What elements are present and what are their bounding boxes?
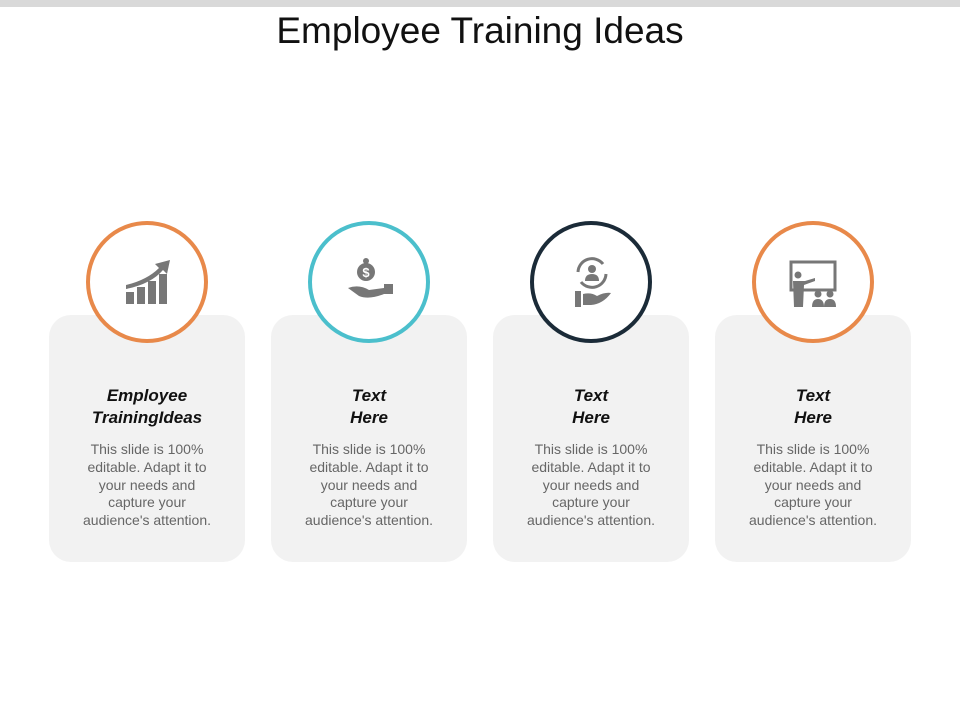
panel: card 3 <box>493 315 689 562</box>
text 3: audience's attention. <box>527 512 655 528</box>
text 4 <box>749 441 877 528</box>
text 3 <box>527 441 655 528</box>
heading 1 <box>92 386 202 427</box>
text 2: This slide is 100% <box>313 441 425 457</box>
text 4: audience's attention. <box>749 512 877 528</box>
heading 3 <box>572 386 610 427</box>
panel: card 4 <box>715 315 911 562</box>
text 1: your needs and <box>99 477 195 493</box>
panel: card 1 <box>49 315 245 562</box>
heading 1: Employee <box>107 386 187 405</box>
heading 3: Here <box>572 408 610 427</box>
icon: growth chart <box>86 221 208 343</box>
icon: presentation <box>752 221 874 343</box>
text 3: editable. Adapt it to <box>531 459 651 475</box>
text 4: editable. Adapt it to <box>753 459 873 475</box>
text 3: This slide is 100% <box>535 441 647 457</box>
text 1: capture your <box>108 494 186 510</box>
text 4: capture your <box>774 494 852 510</box>
text 2: capture your <box>330 494 408 510</box>
heading 3: Text <box>574 386 608 405</box>
text 2: your needs and <box>321 477 417 493</box>
text 2: audience's attention. <box>305 512 433 528</box>
icon: money hand <box>308 221 430 343</box>
heading 1: TrainingIdeas <box>92 408 202 427</box>
heading 4: Here <box>794 408 832 427</box>
heading 4 <box>794 386 832 427</box>
text 4: This slide is 100% <box>757 441 869 457</box>
text 3: capture your <box>552 494 630 510</box>
text 2: editable. Adapt it to <box>309 459 429 475</box>
heading 2 <box>350 386 388 427</box>
icon: people care <box>530 221 652 343</box>
text 2 <box>305 441 433 528</box>
icon: money hand: $ <box>362 265 370 280</box>
heading 4: Text <box>796 386 830 405</box>
heading 2: Here <box>350 408 388 427</box>
text 1: editable. Adapt it to <box>87 459 207 475</box>
heading 2: Text <box>352 386 386 405</box>
text 1: This slide is 100% <box>91 441 203 457</box>
text 3: your needs and <box>543 477 639 493</box>
text 4: your needs and <box>765 477 861 493</box>
text 1 <box>83 441 211 528</box>
title: Employee Training Ideas <box>276 10 684 51</box>
panel: card 2 <box>271 315 467 562</box>
text 1: audience's attention. <box>83 512 211 528</box>
